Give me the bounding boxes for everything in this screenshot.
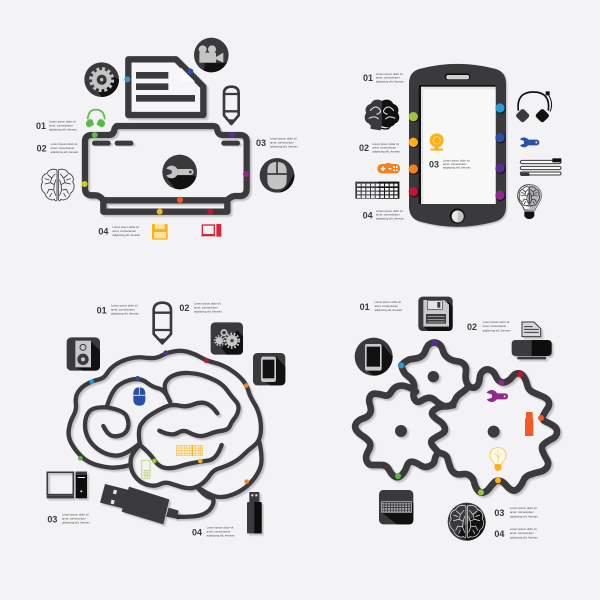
label 03: 03 [47,514,57,524]
label 03: amet, consectetuer [62,516,86,520]
label 01: Lorem ipsum dolor sit [49,120,76,124]
icon: USB stick [247,492,262,533]
label 03: Lorem ipsum dolor sit [510,506,537,510]
home button [450,208,465,224]
label 01: 01 [36,121,46,131]
label 01: adipiscing elit, Aenean [374,308,402,312]
panel: smartphone infographic [355,64,562,227]
document road [128,59,203,115]
label 01: amet, consectetuer [49,124,73,128]
icon: headset [515,91,552,123]
icon: pencil [154,303,171,343]
label 03: amet, consectetuer [443,162,467,166]
label 02 [37,142,79,154]
icon: gear [84,62,119,97]
icon: wrench blue [518,137,539,147]
label 01: 01 [363,73,373,83]
label 02: amet, consectetuer [483,324,506,328]
label 01: Lorem ipsum dolor sit [374,300,401,304]
label 02: adipiscing elit, Aenean [194,309,222,313]
icon: gamepad [377,163,400,173]
icon: phone circle [355,338,393,376]
label 04 [192,526,235,538]
label 04 [363,209,404,221]
label 04: amet, consectetuer [376,213,400,217]
label 03: adipiscing elit, Aenean [270,145,298,149]
icon: gears tile [211,322,243,355]
icon: computer [201,224,221,237]
label 02: adipiscing elit, Aenean [483,328,511,332]
icon: keyboard [355,182,399,199]
label 04: 04 [192,527,202,537]
label 02: Lorem ipsum dolor sit [483,320,509,324]
icon: movie camera [194,38,229,72]
icon: USB plug [100,484,179,524]
label 03 [429,158,471,170]
label 03: 03 [429,159,439,169]
label 02: Lorem ipsum dolor sit [372,142,399,146]
label 04: 04 [98,226,108,236]
printer buttons [92,141,240,146]
phone body [409,64,506,227]
label 04: Lorem ipsum dolor sit [510,527,537,531]
icon: floppy disk [152,224,168,240]
brain road [69,351,262,517]
label 03: adipiscing elit, Aenean [62,520,90,524]
label 01 [97,304,139,316]
label 01: Lorem ipsum dolor sit [111,304,138,308]
icon: brain outline [41,169,74,201]
label 04: 04 [363,210,373,220]
icon: USB stick orange [525,412,533,436]
icon: printer [512,322,552,359]
icon: phone tile [253,353,285,385]
icon: computer black [47,472,87,498]
panel: printer infographic [36,38,298,240]
label 01: amet, consectetuer [376,76,400,80]
label 02: amet, consectetuer [51,146,74,150]
label 04: amet, consectetuer [510,531,534,535]
icon: brain circle [448,503,486,541]
label 02: 02 [37,143,47,153]
label 03: amet, consectetuer [270,141,294,145]
label 03: adipiscing elit, Aenean [443,166,471,170]
label 02: adipiscing elit, Aenean [51,150,79,154]
label 01: adipiscing elit, Aenean [376,79,404,83]
label 03 [494,506,538,518]
label 04: Lorem ipsum dolor sit [112,225,139,229]
label 01: 01 [97,306,107,316]
icon: keyboard tile [379,490,413,524]
panel: brain road infographic [47,301,285,538]
icon: cables [520,158,562,176]
icon: mouse [260,158,294,193]
gear roads [355,342,557,493]
icon: wrench purple [484,390,508,402]
icon: keyboard yellow [176,445,203,456]
label 02: 02 [179,303,189,313]
speaker [445,73,470,80]
icon: wrench [162,155,197,189]
road dots [78,350,249,484]
road dots [395,340,544,495]
printer road [85,126,247,212]
icon: bulb brain [518,185,541,219]
label 04 [494,527,538,539]
label 03 [47,513,90,524]
icon: bulb brain yellow [490,448,506,471]
label 02 [179,301,222,313]
phone dots [409,103,506,201]
icon: pencil [224,87,239,124]
label 03: Lorem ipsum dolor sit [443,158,470,162]
label 01: adipiscing elit, Aenean [49,128,77,132]
label 03: 03 [494,508,504,518]
label 02 [467,320,511,332]
label 01: amet, consectetuer [111,308,135,312]
label 02: 02 [467,322,477,332]
label 02: amet, consectetuer [372,146,396,150]
gear hubs [395,371,500,438]
label 04: adipiscing elit, Aenean [207,534,235,538]
label 02 [359,142,400,153]
label 04: adipiscing elit, Aenean [376,217,404,221]
label 03: Lorem ipsum dolor sit [62,513,89,517]
label 02: Lorem ipsum dolor sit [51,142,77,146]
label 04: amet, consectetuer [207,530,230,534]
label 04: Lorem ipsum dolor sit [207,526,233,530]
label 03: amet, consectetuer [510,510,534,514]
label 01: amet, consectetuer [374,304,398,308]
label 03: Lorem ipsum dolor sit [270,137,297,141]
label 02: 02 [359,143,369,153]
label 03: adipiscing elit, Aenean [510,514,538,518]
label 03 [256,137,298,149]
label 01: Lorem ipsum dolor sit [376,72,403,76]
label 04: amet, consectetuer [112,229,136,233]
icon: webcam [430,133,444,151]
label 02: amet, consectetuer [194,305,218,309]
label 01: adipiscing elit, Aenean [111,312,139,316]
label 02: adipiscing elit, Aenean [372,149,400,153]
label 03: 03 [256,138,266,148]
label 01 [360,300,402,312]
label 02: Lorem ipsum dolor sit [194,301,221,305]
road dots [82,68,249,215]
icon: mouse blue [133,387,145,406]
label 04: adipiscing elit, Aenean [510,535,538,539]
label 01 [363,72,404,83]
label 04: Lorem ipsum dolor sit [376,209,403,213]
label 01: 01 [360,302,370,312]
icon: speaker tile [67,337,100,371]
icon: floppy tile [418,297,453,331]
icon: headphones [86,110,105,127]
label 04 [98,225,140,237]
label 04: adipiscing elit, Aenean [112,233,140,237]
label 04: 04 [494,529,504,539]
icon: phone green [142,460,150,479]
panel: gears infographic [355,297,557,541]
label 01 [36,120,77,132]
icon: brain with cable [365,100,399,130]
